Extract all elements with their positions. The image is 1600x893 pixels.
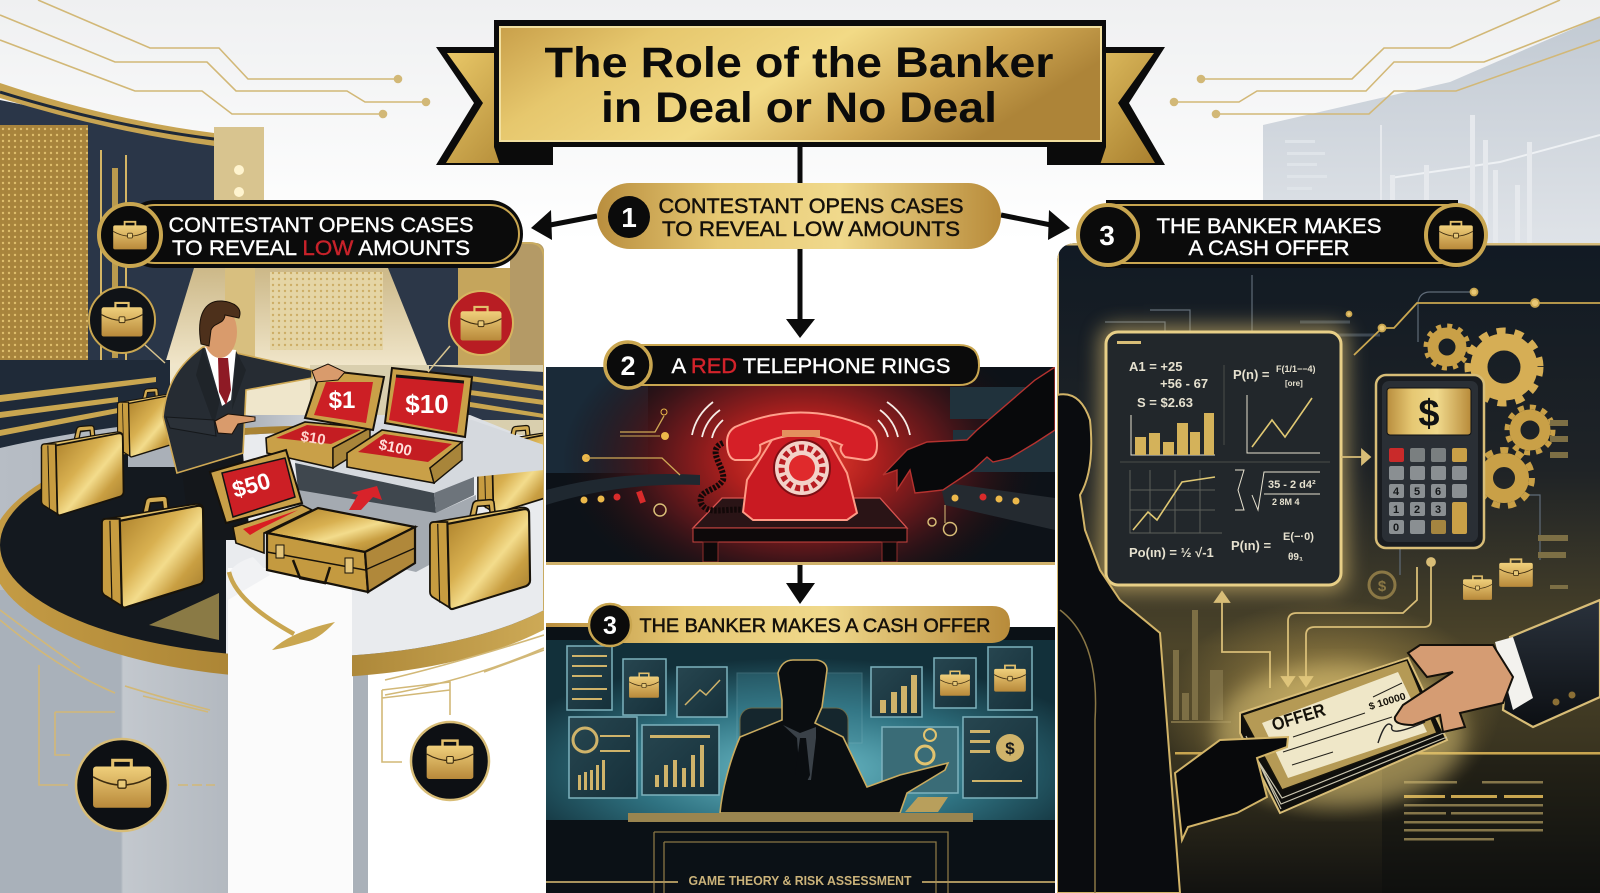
step 1 gold pill: CONTESTANT OPENS CASES: [658, 194, 964, 218]
title text: [544, 39, 1054, 132]
offer cheque stack: [1240, 658, 1447, 813]
open case $100 base: [347, 430, 462, 483]
banker's silhouette hand: [883, 367, 1055, 493]
panel border: [522, 242, 544, 610]
calculator: 0: [1393, 522, 1399, 534]
panel: left scene, contestant opens cases: [0, 83, 544, 893]
open case $50: $50: [229, 467, 273, 503]
formula board: P(ιn) =: [1231, 538, 1271, 553]
icon: briefcase in gold ring: [99, 204, 161, 266]
open case $10 lid: $10: [405, 389, 449, 419]
title text: The Role of the Banker: [544, 39, 1054, 87]
banker silhouette: [720, 660, 948, 813]
arrow: step 2 down to step 3: [786, 565, 815, 604]
desk: [628, 797, 973, 893]
open case $10 lid: [385, 368, 472, 437]
stage back lighting: [0, 243, 544, 450]
number badge 2: 2: [620, 351, 636, 381]
number badge 2: [605, 342, 651, 388]
arrow: step 1 to right panel: [1001, 210, 1070, 240]
step 1 gold pill: [597, 183, 1001, 249]
calculator: 5: [1414, 486, 1420, 498]
gold case upright, front right: [430, 500, 530, 609]
background: right skyline and chart: [1263, 17, 1600, 243]
gold case upright, left: [41, 426, 124, 515]
icon: briefcase in gold ring: [1426, 205, 1486, 265]
formula board: F(1/1−−4): [1276, 364, 1316, 374]
open case $1 lid: $1: [329, 387, 355, 414]
calculator: $: [1418, 393, 1440, 435]
lower right text lines: [1404, 781, 1543, 840]
control lights left: [580, 409, 680, 516]
calculator: 2: [1414, 504, 1420, 516]
left step heading pill: [99, 200, 523, 268]
panel: middle, banker at desk: $: [1005, 739, 1015, 758]
right step heading pill: A CASH OFFER: [1188, 236, 1350, 260]
formula board: [1100, 326, 1347, 591]
circuit lines: top left: [0, 0, 430, 118]
open case $1 lid: [305, 370, 384, 430]
icon: briefcase, red circle: [428, 291, 513, 372]
panel: right scene, banker makes cash offer: [1057, 243, 1600, 893]
caption: GAME THEORY & RISK ASSESSMENT: [688, 874, 912, 888]
calculator: [1376, 375, 1484, 548]
background bars and side lines: [1171, 420, 1600, 754]
right step heading pill: [1078, 200, 1486, 268]
ringing waves: [692, 402, 910, 438]
number badge 3: 3: [1099, 220, 1115, 251]
formula board: θ9₁: [1288, 552, 1303, 563]
closed gold case: [267, 508, 415, 592]
number badge 3: 3: [603, 612, 617, 640]
small gold icons: [1369, 559, 1533, 600]
formula board: +56 - 67: [1160, 376, 1208, 391]
gold case upright, back left: [117, 388, 170, 458]
raised platform: [295, 430, 543, 513]
gold case upright, front left: [102, 496, 204, 608]
formula board: P(n) =: [1233, 367, 1270, 382]
red arrow: [349, 486, 382, 510]
round stage: [0, 400, 610, 893]
step 3 gold heading pill: THE BANKER MAKES A CASH OFFER: [640, 615, 990, 637]
panel: middle, red telephone: [546, 367, 1055, 562]
studio back wall: [0, 83, 264, 380]
left step heading pill: TO REVEAL LOW AMOUNTS: [172, 236, 470, 260]
arrow: banner down to step 1: [798, 147, 802, 187]
formula board: [ore]: [1285, 379, 1303, 388]
formula board: A1 = +25: [1129, 359, 1182, 374]
icon: briefcase, bottom left: [76, 739, 168, 831]
decorative floor circuit lines: [0, 610, 544, 785]
glow behind cheque: [1215, 663, 1465, 807]
telephone: [701, 412, 877, 520]
formula board: E(−·0): [1283, 531, 1314, 543]
calculator: 3: [1435, 504, 1441, 516]
circuit traces: [1105, 275, 1540, 575]
contestant figure: [163, 301, 345, 540]
control lights right: [928, 494, 1020, 536]
calculator: 4: [1393, 486, 1400, 498]
title banner: [436, 20, 1165, 165]
monitors right: [871, 647, 1037, 798]
open case $50: [210, 450, 312, 553]
open case $10 base: $10: [299, 428, 327, 449]
step 1 gold pill: TO REVEAL LOW AMOUNTS: [662, 217, 960, 241]
right ribbon tail: [1047, 47, 1165, 165]
open case $100 base: $100: [377, 436, 413, 460]
step 2 heading pill: A RED TELEPHONE RINGS: [672, 355, 950, 378]
calculator: 6: [1435, 486, 1441, 498]
right step heading pill: THE BANKER MAKES: [1156, 214, 1382, 238]
flow arrows: [1215, 450, 1435, 688]
formula board: Po(ιn) = ½ √-1: [1129, 545, 1214, 560]
desk: [693, 498, 907, 562]
panel: middle, banker at desk: [546, 627, 1055, 893]
icon: briefcase, black circle top left: [89, 287, 165, 363]
open case $10 base: [266, 422, 370, 468]
banner plate: [494, 20, 1106, 147]
number badge 3: [1078, 205, 1138, 265]
monitors left: [567, 646, 727, 798]
hand giving cheque: [1395, 600, 1600, 732]
step 3 gold heading pill: [546, 604, 1010, 646]
arrow: step 1 down to step 2: [786, 247, 815, 338]
step 2 heading pill: [605, 342, 979, 388]
formula board: S = $2.63: [1137, 395, 1193, 410]
gears: [1426, 326, 1553, 506]
circuit lines: top right: [1170, 0, 1600, 118]
gold case upright, back right: [477, 424, 543, 511]
banker silhouette, left: [1057, 394, 1180, 893]
left step heading pill: CONTESTANT OPENS CASES: [168, 213, 474, 237]
calculator: 1: [1393, 504, 1399, 516]
step 1 gold pill: 1: [621, 202, 637, 233]
floor: [0, 415, 544, 893]
hand receiving cheque: [1175, 737, 1288, 840]
white band under telephone: [546, 562, 1055, 628]
offer cheque stack: $ 10000: [1368, 691, 1408, 713]
number badge 3: [589, 604, 631, 646]
arrow: step 1 to left panel: [531, 210, 597, 240]
small gold icons: $: [1378, 578, 1387, 595]
left ribbon tail: [436, 47, 553, 165]
title text: in Deal or No Deal: [601, 84, 997, 132]
formula board: 35 - 2 d4²: [1268, 479, 1316, 491]
icon: briefcase, bottom right: [411, 722, 489, 800]
formula board: 2 8M 4: [1272, 497, 1300, 507]
offer cheque stack: OFFER: [1269, 700, 1328, 735]
